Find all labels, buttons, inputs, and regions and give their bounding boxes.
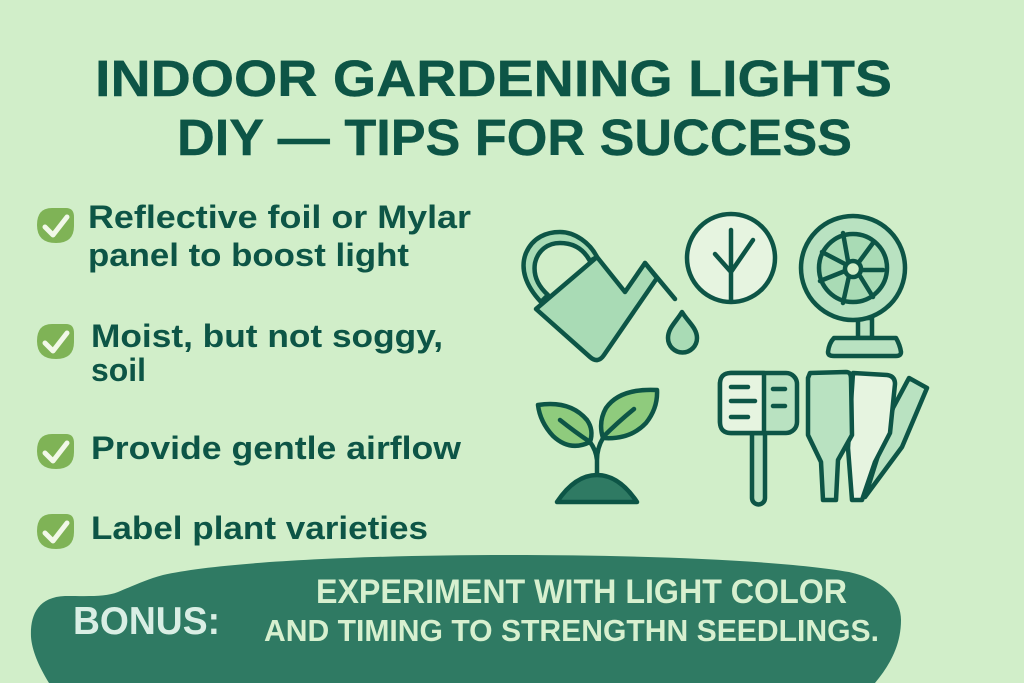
icon: seed packets [808,372,927,500]
bonus banner [31,555,901,683]
icon: watering can [524,232,697,360]
bonus text: EXPERIMENT WITH LIGHT COLOR [316,573,847,611]
item: reflective foil [37,199,471,273]
bonus text [264,573,879,648]
bonus label: BONUS: [73,600,220,643]
icon: plant label sign [720,373,797,504]
icon: tree in circle [687,214,775,302]
bonus text: AND TIMING TO STRENGTHN SEEDLINGS. [264,613,879,648]
title: DIY — TIPS FOR SUCCESS [177,109,852,166]
checklist [37,199,471,549]
item: labels: Label plant varieties [91,510,428,546]
item: moist soil: Moist, but not soggy, [91,318,443,354]
item: moist soil: soil [91,352,146,388]
item: reflective foil: Reflective foil or Mylar [88,199,471,235]
item: moist soil [37,318,443,388]
item: airflow: Provide gentle airflow [91,430,462,466]
icon: seedling [538,390,657,502]
title: INDOOR GARDENING LIGHTS [95,50,892,107]
title [95,50,892,166]
item: reflective foil: panel to boost light [88,237,409,273]
icon: fan [801,216,905,356]
